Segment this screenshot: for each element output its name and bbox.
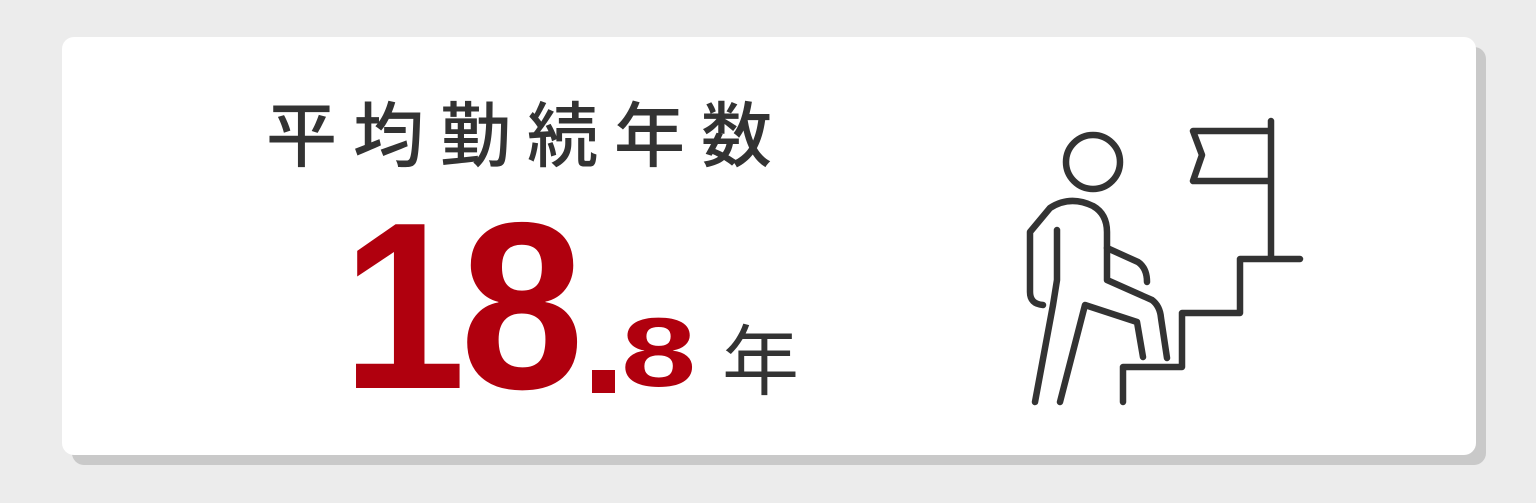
value: 18.8: 18 [342, 174, 578, 439]
unit: 年 [722, 301, 799, 412]
title: 平均勤続年数 [266, 80, 788, 182]
value: 18.8 [342, 174, 696, 439]
value: 18.8: 8 [621, 297, 696, 407]
panel: card [62, 37, 1476, 455]
